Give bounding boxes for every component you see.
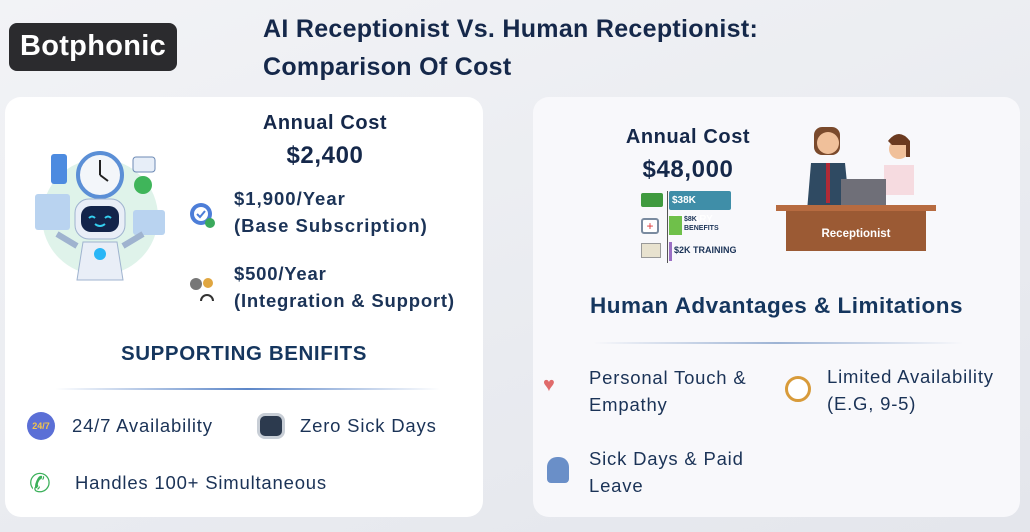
title: Comparison Of Cost <box>263 53 511 81</box>
text: integration: $500/Year <box>234 263 327 284</box>
benefit: 24/7: 24/7 Availability <box>72 415 213 436</box>
icon: clock <box>785 376 811 402</box>
chart: cost breakdown: $38K SALARY <box>672 195 713 225</box>
item: limited availability: Limited Availability <box>827 366 994 387</box>
logo: Botphonic <box>20 30 166 62</box>
benefit: 24/7 <box>27 412 213 440</box>
heading: human advantages: Human Advantages & Limitations <box>590 293 963 318</box>
chart: cost breakdown: + <box>646 219 654 233</box>
chart: cost breakdown: $8K <box>684 216 697 223</box>
chart: cost breakdown: BENEFITS <box>684 225 719 232</box>
text: annual cost <box>626 126 750 183</box>
item: personal touch: Empathy <box>589 394 668 415</box>
benefit: zero sick days <box>257 413 437 439</box>
panel: AI receptionist <box>5 97 483 517</box>
text: annual cost: $2,400 <box>286 142 364 169</box>
text: base subscription: $1,900/Year <box>234 188 346 209</box>
icon: phone: ✆ <box>29 468 51 498</box>
item: sick days <box>547 448 744 496</box>
title: AI Receptionist Vs. Human Receptionist: <box>263 15 758 43</box>
logo <box>9 23 177 71</box>
text: base subscription <box>234 188 428 236</box>
item: sick days: Sick Days & Paid <box>589 448 744 469</box>
item: personal touch <box>543 367 746 415</box>
text: base subscription: (Base Subscription) <box>234 215 428 236</box>
title <box>263 15 758 81</box>
icon: 24/7: 24/7 <box>32 421 50 431</box>
text: annual cost: $48,000 <box>643 156 733 183</box>
illustration: receptionist desk: Receptionist <box>821 228 891 240</box>
chart: cost breakdown <box>641 191 737 263</box>
icon: robot illustration <box>35 151 165 280</box>
benefit: simultaneous calls <box>29 468 327 498</box>
heading: supporting benefits: SUPPORTING BENIFITS <box>121 342 367 365</box>
panel: human receptionist <box>533 97 1020 517</box>
icon: gear check <box>190 203 215 228</box>
icon: sick person <box>547 457 569 483</box>
text: integration: (Integration & Support) <box>234 290 455 311</box>
icon: 24/7 <box>27 412 55 440</box>
chart: cost breakdown: $2K TRAINING <box>674 245 737 255</box>
item: sick days: Leave <box>589 475 643 496</box>
item: limited availability <box>785 366 994 414</box>
icon: heart hands: ♥ <box>543 374 555 396</box>
icon: bot face <box>257 413 285 439</box>
illustration: receptionist desk <box>776 127 936 251</box>
item: limited availability: (E.G, 9-5) <box>827 393 916 414</box>
item: personal touch: Personal Touch & <box>589 367 746 388</box>
text: integration <box>234 263 455 311</box>
text: annual cost: Annual Cost <box>263 112 387 134</box>
text: annual cost: Annual Cost <box>626 126 750 148</box>
icon: gears headset <box>190 278 214 301</box>
benefit: zero sick days: Zero Sick Days <box>300 415 437 436</box>
text: annual cost <box>263 112 387 169</box>
benefit: simultaneous calls: Handles 100+ Simultaneous <box>75 472 327 493</box>
